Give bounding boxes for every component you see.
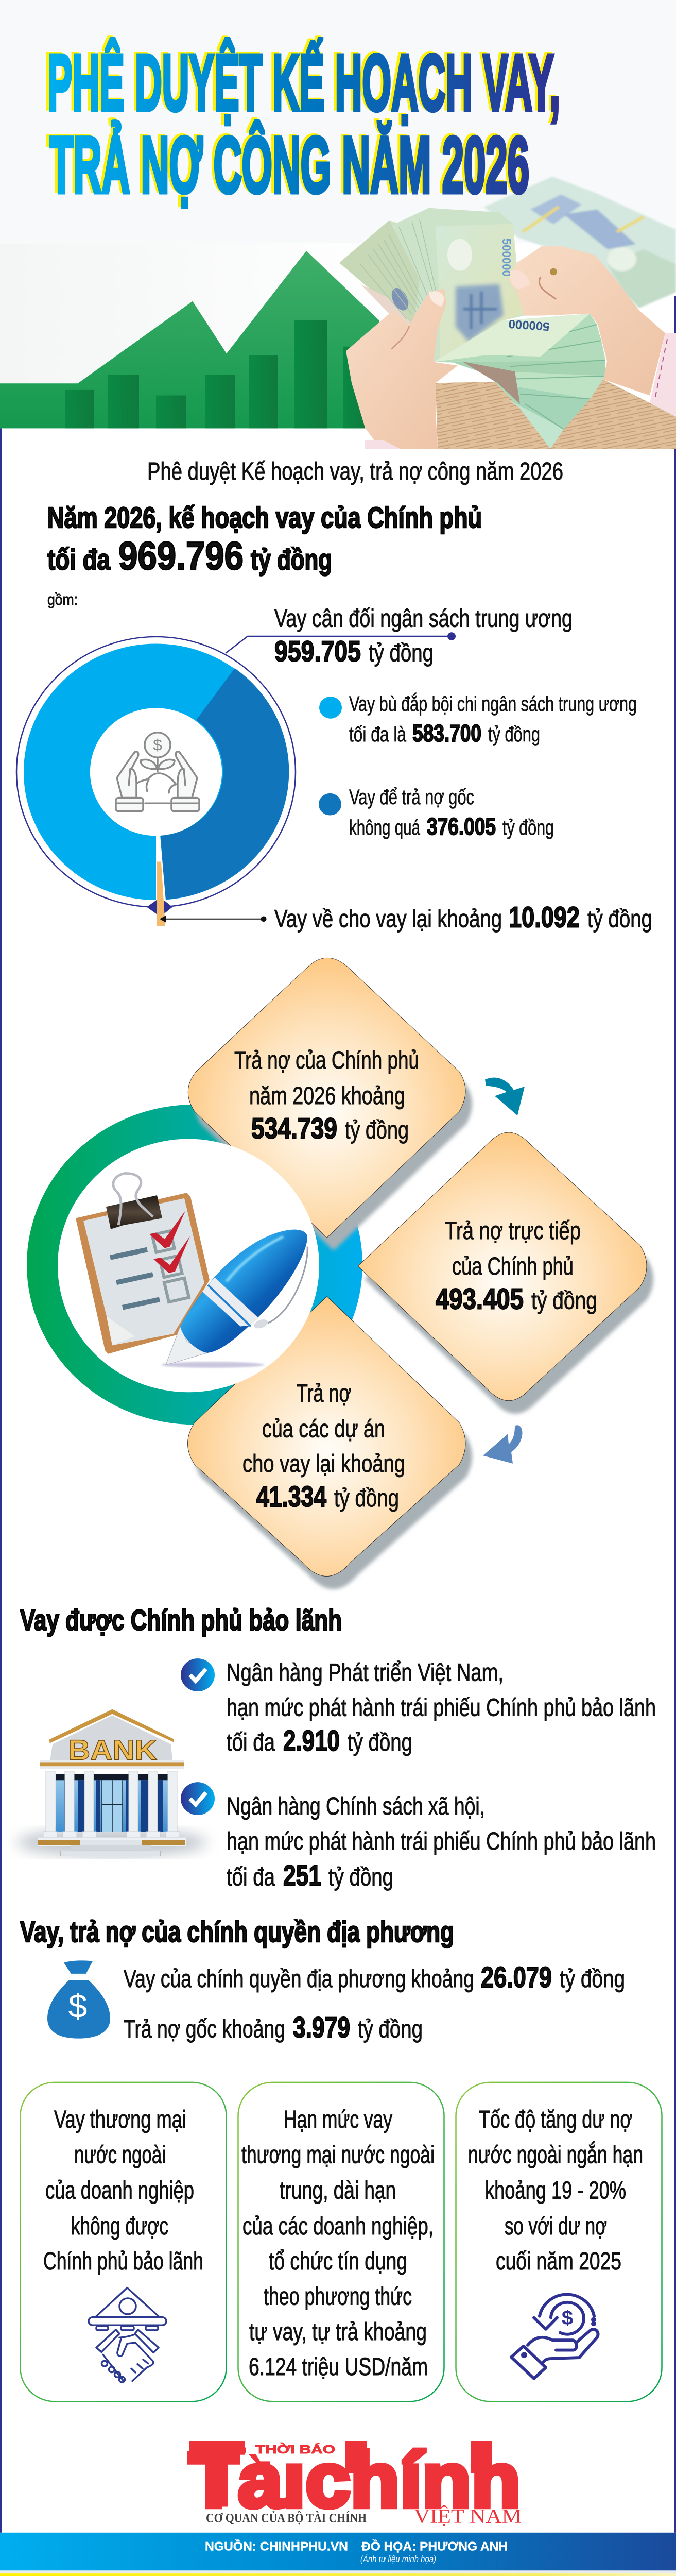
diamond: on-lent project repayment: của các dự án: [262, 1415, 385, 1443]
callout: on-lending: Vay về cho vay lại khoảng: [274, 905, 502, 933]
callout: central budget borrowing: 959.705: [274, 635, 361, 668]
panel: short term foreign debt growth: khoảng 19 - 20%: [485, 2176, 626, 2204]
arrow: top to right: [485, 1078, 525, 1115]
text: local borrowing: tỷ đồng: [560, 1965, 625, 1993]
diamond: on-lent project repayment: [187, 1296, 472, 1589]
icon: bank building: BANK: [68, 1734, 157, 1766]
callout: on-lending: [160, 901, 652, 934]
text: local principal repayment: tỷ đồng: [358, 2015, 423, 2043]
panel: commercial foreign loans without guarantee: nước ngoài: [74, 2141, 166, 2168]
diamond: direct repayment: 493.405: [436, 1283, 524, 1315]
icon: money bag: $: [68, 1988, 87, 2025]
item: Vietnam Bank for Social Policies: [181, 1782, 656, 1892]
item: Vietnam Development Bank: tỷ đồng: [348, 1728, 412, 1756]
diamond: government debt repayment: [188, 958, 472, 1250]
panel: medium and long term foreign loan limit: thương mại nước ngoài: [241, 2141, 435, 2168]
legend: deficit financing: 583.700: [412, 720, 481, 747]
icon: hand and dollar cycle: [511, 2294, 598, 2379]
panel: medium and long term foreign loan limit: Hạn mức vay: [284, 2106, 392, 2133]
callout: on-lending: 10.092: [509, 901, 580, 934]
panel: medium and long term foreign loan limit: trung, dài hạn: [280, 2176, 396, 2204]
panel: commercial foreign loans without guarantee: không được: [71, 2212, 168, 2240]
footer band: ĐỒ HỌA: PHƯƠNG ANH: [361, 2539, 508, 2554]
item: Vietnam Development Bank: tối đa: [227, 1728, 275, 1756]
heading: local government: Vay, trả nợ của chính quyền địa phương: [20, 1916, 454, 1948]
heading: guaranteed borrowing: Vay được Chính phủ bảo lãnh: [20, 1604, 342, 1637]
icon: bank building: [16, 1709, 207, 1856]
item: Vietnam Development Bank: Ngân hàng Phát triển Việt Nam,: [227, 1658, 504, 1686]
diamond: on-lent project repayment: tỷ đồng: [334, 1484, 399, 1512]
icon: hands with money plant: $: [153, 736, 162, 754]
header illustration: hands counting banknotes: 500000: [500, 239, 513, 277]
panel: medium and long term foreign loan limit: tự vay, tự trả khoảng: [249, 2318, 427, 2346]
logo: Thời báo Tài chính Việt Nam: Tàichính: [189, 2437, 521, 2523]
icon: clipboard: [76, 1173, 210, 1354]
panel: short term foreign debt growth: cuối năm 2025: [496, 2247, 621, 2275]
panel: commercial foreign loans without guarantee: [21, 2082, 227, 2401]
diamond: direct repayment: tỷ đồng: [531, 1286, 597, 1314]
text: local principal repayment: Trả nợ gốc khoảng: [124, 2015, 285, 2043]
panel: medium and long term foreign loan limit: tổ chức tín dụng: [269, 2247, 407, 2275]
arrow: right to bottom: [483, 1425, 522, 1464]
icon: blue pen: [161, 1230, 307, 1368]
header illustration: green chart: [0, 251, 379, 428]
text: local borrowing: Vay của chính quyền địa phương khoảng: [124, 1965, 474, 1993]
logo: Thời báo Tài chính Việt Nam: VIỆT NAM: [414, 2505, 522, 2527]
icon: hands with money plant: [116, 733, 199, 811]
heading: total government borrowing: [47, 502, 482, 578]
panel: medium and long term foreign loan limit: 6.124 triệu USD/năm: [249, 2353, 428, 2381]
title: [47, 38, 560, 210]
diamond: direct repayment: của Chính phủ: [452, 1252, 574, 1280]
text: local borrowing: 26.079: [481, 1961, 552, 1994]
donut centre hole: [90, 708, 222, 836]
panel: commercial foreign loans without guarantee: của doanh nghiệp: [45, 2176, 194, 2204]
item: Vietnam Bank for Social Policies: 251: [283, 1859, 321, 1892]
legend: deficit financing: tối đa là: [349, 723, 406, 746]
legend: principal repayment: [319, 786, 554, 840]
diamond: direct repayment: [358, 1132, 653, 1414]
footer band: (Ảnh tư liệu minh họa): [360, 2553, 436, 2564]
diamond: on-lent project repayment: cho vay lại khoảng: [242, 1450, 405, 1478]
legend: principal repayment: không quá: [349, 816, 420, 839]
panel: medium and long term foreign loan limit: theo phương thức: [264, 2282, 412, 2310]
icon: bank roof and handshake: [89, 2288, 166, 2382]
callout: central budget borrowing: Vay cân đối ngân sách trung ương: [274, 604, 573, 632]
diamond: on-lent project repayment: 41.334: [256, 1481, 326, 1513]
panel: commercial foreign loans without guarantee: Vay thương mại: [54, 2106, 186, 2133]
panel: medium and long term foreign loan limit: [238, 2082, 444, 2401]
panel: short term foreign debt growth: [456, 2082, 662, 2401]
heading: total government borrowing: 969.796: [118, 533, 244, 578]
legend: principal repayment: tỷ đồng: [502, 816, 554, 839]
subtitle: Phê duyệt Kế hoạch vay, trả nợ công năm 2026: [147, 457, 563, 485]
diamond: government debt repayment: năm 2026 khoảng: [249, 1082, 405, 1110]
panel: commercial foreign loans without guarantee: Chính phủ bảo lãnh: [43, 2247, 203, 2275]
header illustration: hands counting banknotes: 500000: [508, 317, 550, 333]
panel: short term foreign debt growth: so với dư nợ: [505, 2212, 607, 2240]
legend: principal repayment: Vay để trả nợ gốc: [349, 786, 474, 809]
item: Vietnam Development Bank: 2.910: [283, 1725, 340, 1757]
logo: Thời báo Tài chính Việt Nam: THỜI BÁO: [255, 2442, 335, 2456]
item: Vietnam Bank for Social Policies: tỷ đồng: [328, 1863, 393, 1891]
logo: Thời báo Tài chính Việt Nam: CƠ QUAN CỦA BỘ TÀI CHÍNH: [206, 2511, 367, 2525]
legend: deficit financing: tỷ đồng: [488, 723, 540, 746]
icon: check badge: [181, 1658, 215, 1691]
legend: deficit financing: [319, 692, 637, 747]
icon: money bag: [47, 1960, 110, 2039]
diamond: on-lent project repayment: Trả nợ: [297, 1379, 351, 1407]
footer band: NGUỒN: CHINHPHU.VN: [205, 2539, 348, 2554]
text: local principal repayment: [124, 2012, 423, 2044]
item: Vietnam Development Bank: [181, 1658, 656, 1757]
header illustration: hands counting banknotes: [339, 177, 676, 449]
marker: navy diamonds and orange slice: [147, 861, 172, 926]
heading: total government borrowing: tỷ đồng: [251, 544, 332, 576]
item: Vietnam Bank for Social Policies: Ngân hàng Chính sách xã hội,: [227, 1792, 485, 1820]
item: Vietnam Bank for Social Policies: tối đa: [227, 1863, 275, 1891]
legend: principal repayment: 376.005: [427, 814, 496, 840]
icon: hand and dollar cycle: $: [562, 2307, 573, 2329]
diamond: government debt repayment: tỷ đồng: [345, 1116, 409, 1144]
text: local principal repayment: 3.979: [293, 2012, 350, 2044]
icon: check badge: [181, 1782, 215, 1815]
text: gồm: gồm:: [47, 590, 78, 608]
callout: central budget borrowing: [226, 604, 573, 668]
diamond: government debt repayment: Trả nợ của Chính phủ: [234, 1046, 419, 1074]
panel: medium and long term foreign loan limit: của các doanh nghiệp,: [242, 2212, 434, 2240]
diamond: government debt repayment: 534.739: [251, 1112, 337, 1145]
diamond: direct repayment: Trả nợ trực tiếp: [445, 1217, 581, 1245]
ring behind clipboard: [27, 1105, 362, 1425]
donut chart: [16, 637, 296, 926]
callout: on-lending: tỷ đồng: [587, 905, 652, 933]
heading: total government borrowing: Năm 2026, kế hoạch vay của Chính phủ: [47, 502, 482, 534]
heading: total government borrowing: tối đa: [47, 544, 111, 576]
callout: central budget borrowing: tỷ đồng: [369, 639, 434, 667]
footer band: [0, 2533, 676, 2576]
white circle with clipboard and pen: [58, 1139, 319, 1392]
